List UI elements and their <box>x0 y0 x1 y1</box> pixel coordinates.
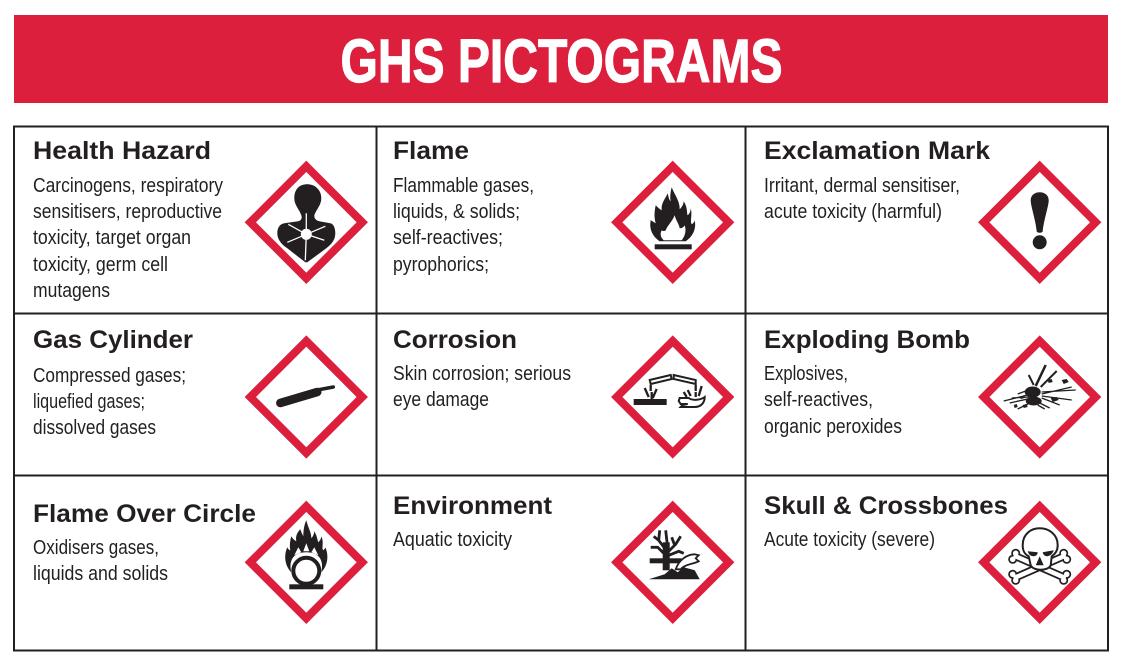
icon: skull and crossbones <box>984 506 1096 618</box>
text: health hazard description <box>33 175 223 302</box>
heading: flame over circle: Flame Over Circle <box>33 500 256 528</box>
text: health hazard description: mutagens <box>33 280 110 302</box>
text: flame over circle description: liquids and solids <box>33 563 168 585</box>
text: exploding bomb description <box>764 363 902 438</box>
panel: gas cylinder <box>33 326 362 453</box>
heading: gas cylinder: Gas Cylinder <box>33 326 193 354</box>
icon: exclamation mark <box>984 166 1096 278</box>
text: health hazard description: sensitisers, reproductive <box>33 201 222 223</box>
text: corrosion description: Skin corrosion; serious <box>393 363 571 385</box>
icon: exploding bomb <box>984 341 1096 453</box>
panel: exploding bomb <box>764 326 1096 453</box>
text: exclamation mark description <box>764 175 960 223</box>
panel: skull and crossbones <box>764 492 1096 618</box>
text: corrosion description <box>393 363 571 411</box>
title banner <box>14 15 1108 103</box>
icon: corrosion <box>617 341 729 453</box>
panel: health hazard <box>33 137 362 302</box>
text: flame description: liquids, & solids; <box>393 201 520 223</box>
text: health hazard description: Carcinogens, respiratory <box>33 175 223 197</box>
heading: corrosion: Corrosion <box>393 326 517 354</box>
text: exclamation mark description: Irritant, dermal sensitiser, <box>764 175 960 197</box>
icon: gas cylinder <box>250 341 362 453</box>
text: exclamation mark description: acute toxicity (harmful) <box>764 201 942 223</box>
heading: exploding bomb: Exploding Bomb <box>764 326 970 354</box>
text: flame over circle description <box>33 537 168 585</box>
icon: environment <box>617 506 729 618</box>
icon: flame over circle <box>250 506 362 618</box>
icon: flame <box>617 166 729 278</box>
text: flame description <box>393 175 534 276</box>
text: skull and crossbones description: Acute toxicity (severe) <box>764 529 935 551</box>
text: gas cylinder description <box>33 365 186 439</box>
text: gas cylinder description: Compressed gases; <box>33 365 186 387</box>
text: flame description: Flammable gases, <box>393 175 534 197</box>
panel: corrosion <box>393 326 729 453</box>
text: flame over circle description: Oxidisers gases, <box>33 537 159 559</box>
heading: exclamation mark: Exclamation Mark <box>764 137 990 165</box>
heading: skull and crossbones: Skull & Crossbones <box>764 492 1008 520</box>
text: gas cylinder description: liquefied gases; <box>33 391 145 413</box>
text: corrosion description: eye damage <box>393 389 489 411</box>
heading: health hazard: Health Hazard <box>33 137 211 165</box>
panel: environment <box>393 492 729 618</box>
text: exploding bomb description: Explosives, <box>764 363 848 385</box>
panel: flame over circle <box>33 500 362 618</box>
heading: flame: Flame <box>393 137 469 165</box>
text: flame description: self-reactives; <box>393 227 503 249</box>
text: exploding bomb description: organic peroxides <box>764 416 902 438</box>
heading: environment: Environment <box>393 492 553 520</box>
text: flame description: pyrophorics; <box>393 254 489 276</box>
text: environment description: Aquatic toxicity <box>393 529 512 551</box>
text: gas cylinder description: dissolved gases <box>33 417 156 439</box>
table grid <box>14 126 1108 651</box>
panel: flame <box>393 137 729 278</box>
text: health hazard description: toxicity, germ cell <box>33 254 168 276</box>
text: health hazard description: toxicity, target organ <box>33 227 191 249</box>
icon: health hazard <box>250 166 362 278</box>
title: GHS PICTOGRAMS <box>340 27 782 95</box>
text: exploding bomb description: self-reactives, <box>764 389 873 411</box>
panel: exclamation mark <box>764 137 1096 278</box>
